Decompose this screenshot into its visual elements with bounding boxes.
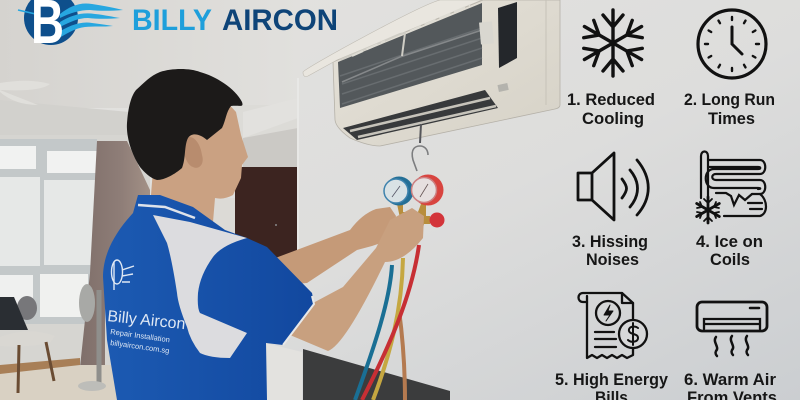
feature wall edge [297,78,299,260]
label: Coils [710,250,750,269]
red knob [430,212,444,228]
technician [103,69,424,400]
label: Noises [586,250,639,269]
chair and bag [0,296,55,393]
symptom 2: long run times [684,10,775,128]
label: 1. Reduced [567,90,655,109]
icon: small snowflake [697,197,719,223]
label: 4. Ice on [696,232,763,251]
shirt white panel [153,215,247,358]
label: 6. Warm Air [684,370,776,389]
service manifold with hoses [355,124,444,400]
shirt text: Repair Installation [110,327,170,344]
logo wind swooshes [54,3,123,41]
red hose [362,245,419,400]
icon: snowflake [579,10,647,76]
air conditioner [303,0,560,146]
curtain [80,141,150,367]
door [235,167,297,262]
label: Cooling [582,109,644,128]
symptom 6: warm air from vents [684,302,777,400]
hair [127,69,243,180]
aircon service panel [498,2,517,68]
label: Times [708,109,755,128]
aircon coil [338,3,482,108]
brass fitting [397,204,430,232]
brown hose [399,310,405,400]
icon: wall AC with warm air [697,302,767,356]
hook [420,124,421,143]
standing fan [78,284,106,391]
icon: bill [578,293,647,358]
aircon lid [303,0,482,76]
sofa [265,343,302,400]
logo word BILLY: BILLY [132,4,212,37]
icon: clock [698,10,766,78]
label: 2. Long Run [684,90,775,109]
shirt text [107,308,186,355]
label: 3. Hissing [572,232,648,251]
far arm [270,207,396,285]
blue gauge [384,176,414,206]
yellow hose [373,258,403,400]
blue hose [355,265,392,400]
symptom 1: reduced cooling [567,10,655,128]
neck and face [151,100,248,222]
icon: speaker [578,153,648,220]
aircon vent [343,90,498,140]
floor [0,365,120,400]
logo globe [24,0,78,45]
blue knob [376,211,390,225]
shirt text: billyaircon.com.sg [110,338,170,355]
logo word AIRCON: AIRCON [222,4,338,37]
symptom 3: hissing noises [572,153,648,269]
polo shirt [103,195,314,400]
shirt text: Billy Aircon [107,308,186,333]
collar stripe [138,205,195,218]
logo thin swoosh [18,10,40,15]
symptom 5: high energy bills [555,293,669,400]
near arm [290,208,424,351]
aircon body [333,0,560,146]
symptom 4: ice on coils [696,152,766,269]
logo [18,0,338,57]
low black bench [303,349,450,400]
window [0,139,97,324]
icon: iced coil [701,152,766,216]
shirt logo [112,260,134,290]
label: 5. High Energy [555,370,669,389]
red gauge [412,174,444,206]
sleeve trim [283,296,314,345]
ceiling fan [0,81,50,105]
